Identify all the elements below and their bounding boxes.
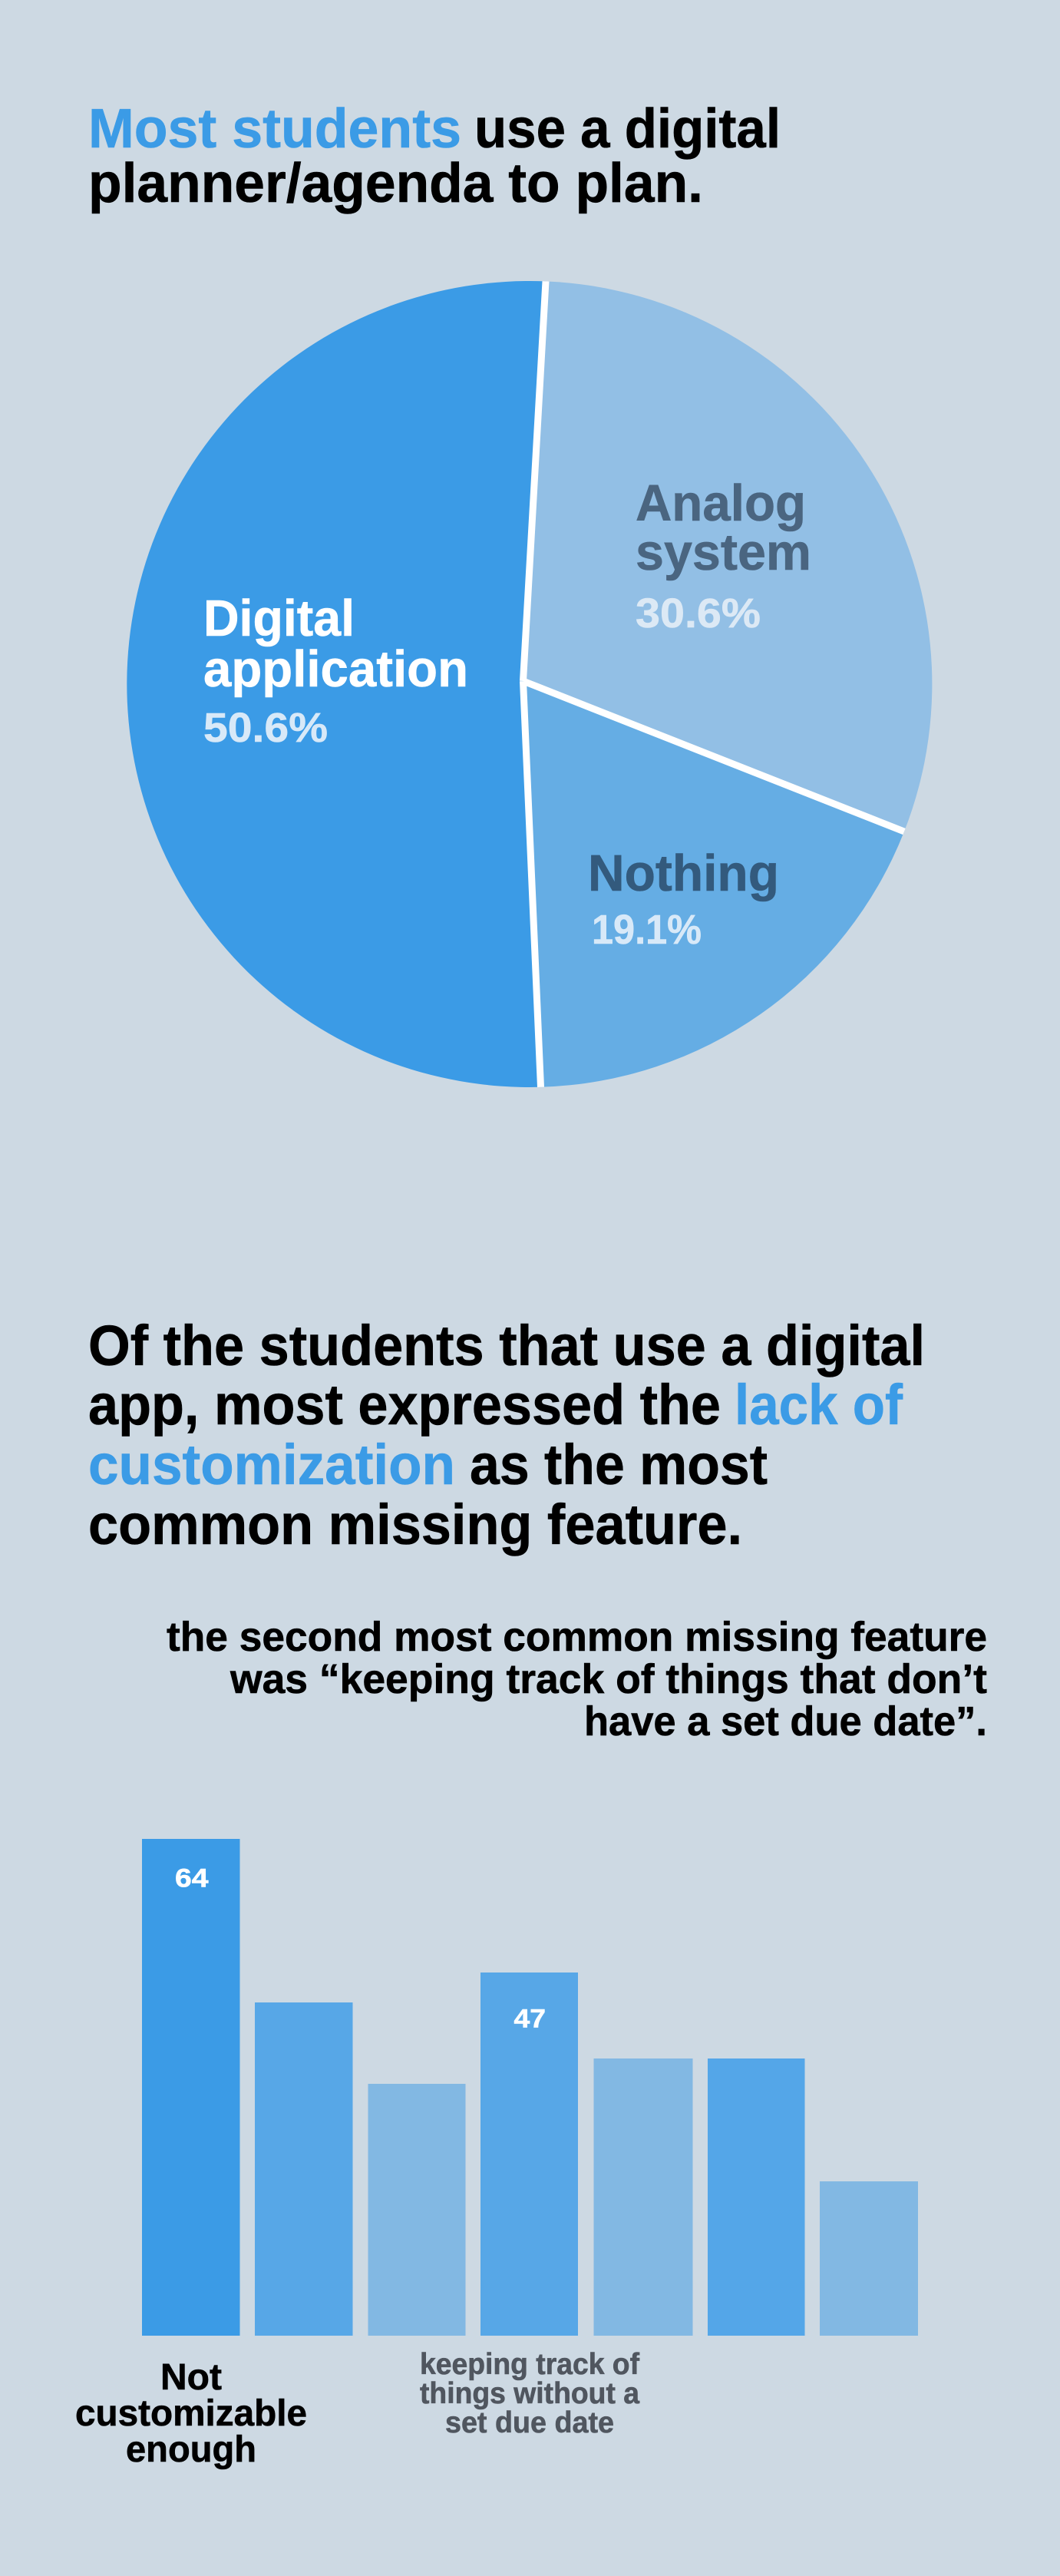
label: digital application 50.6%: 50.6%: [203, 705, 328, 751]
heading: lack of customization: [88, 1314, 925, 1556]
title: most students use a digital planner: use a digital: [474, 98, 781, 160]
bar label: not customizable enough: customizable: [75, 2393, 307, 2434]
label: analog system 30.6%: system: [636, 524, 811, 581]
value: 47: 47: [514, 2004, 546, 2033]
label: analog system 30.6%: Analog: [636, 475, 806, 532]
subheading: second most common missing feature: [167, 1615, 987, 1744]
slice: digital application: [127, 281, 546, 1087]
value: 64: 64: [175, 1864, 209, 1893]
bar 2: [255, 2002, 353, 2336]
title: most students use a digital planner: [88, 98, 781, 214]
bar label: keeping track of things without a set due date: things without a: [420, 2377, 639, 2410]
heading: lack of customization: app, most expressed the: [88, 1373, 721, 1437]
pie chart: planning method: [127, 281, 932, 1087]
bar label: not customizable enough: enough: [126, 2429, 256, 2470]
title: most students use a digital planner: Most students: [88, 98, 461, 160]
label: digital application 50.6%: [203, 590, 468, 751]
subheading: second most common missing feature: was “keeping track of things that don’t: [230, 1657, 987, 1702]
slice: nothing: [523, 681, 904, 1087]
bar label: not customizable enough: [75, 2357, 307, 2470]
bar label: keeping track of things without a set due date: set due date: [445, 2406, 614, 2439]
bar label: keeping track of things without a set due date: [420, 2348, 640, 2439]
heading: lack of customization: as the most: [470, 1433, 768, 1496]
bar 7: [820, 2181, 918, 2336]
bar chart: missing features: [142, 1839, 918, 2336]
subheading: second most common missing feature: have a set due date”.: [584, 1699, 987, 1744]
heading: lack of customization: customization: [88, 1433, 455, 1496]
label: digital application 50.6%: application: [203, 640, 468, 698]
bar label: not customizable enough: Not: [160, 2357, 222, 2398]
title: most students use a digital planner: planner/agenda to plan.: [88, 153, 703, 214]
heading: lack of customization: Of the students that use a digital: [88, 1314, 925, 1377]
bar 6: [708, 2058, 804, 2336]
bar: not customizable enough: [142, 1839, 239, 2336]
label: analog system 30.6%: 30.6%: [636, 590, 761, 637]
label: nothing 19.1%: Nothing: [588, 845, 779, 902]
slice: analog system: [523, 281, 932, 832]
label: nothing 19.1%: 19.1%: [592, 907, 702, 953]
label: analog system 30.6%: [636, 475, 811, 637]
bar: keeping track of things: [480, 1973, 578, 2336]
heading: lack of customization: common missing feature.: [88, 1493, 742, 1556]
bar 5: [594, 2058, 692, 2336]
label: digital application 50.6%: Digital: [203, 590, 355, 647]
heading: lack of customization: lack of: [735, 1373, 903, 1437]
bar 3: [368, 2084, 465, 2336]
label: nothing 19.1%: [588, 845, 779, 953]
subheading: second most common missing feature: the second most common missing feature: [167, 1615, 987, 1660]
bar label: keeping track of things without a set due date: keeping track of: [420, 2348, 640, 2381]
